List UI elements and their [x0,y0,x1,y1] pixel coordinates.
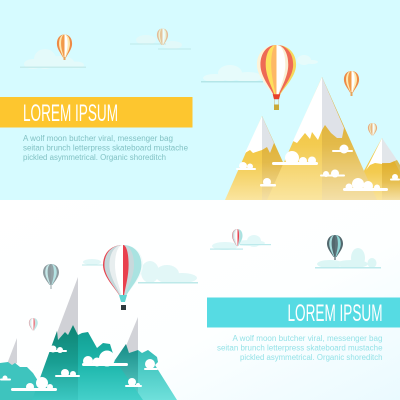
mountain: bottom left [0,338,50,400]
balloon: slate left [43,264,59,289]
text block: top description: A wolf moon butcher viral, messenger bag [23,134,173,143]
clouds on bottom mountains [0,346,158,391]
text block: top description [23,134,188,162]
cloud: top left [20,49,86,69]
balloon: slate right [327,235,343,260]
cloud: top centre [130,35,191,50]
balloon: large striped yellow [257,45,296,110]
balloon: large red and teal [103,245,143,310]
text block: top description: seitan brunch letterpress skateboard mustache [23,144,188,152]
mountain: top centre [267,77,377,200]
mountain: top left [225,116,300,200]
text block: bottom description: pickled asymmetrical. Organic shoreditch [240,353,382,362]
balloon: faint left [29,318,38,330]
balloon: faint far right [368,123,377,136]
mountain: bottom centre [32,277,143,400]
mountain: bottom right [115,317,177,400]
balloon: small orange top left [57,34,72,60]
text block: bottom description: seitan brunch letterpress skateboard mustache [217,344,382,352]
banner: yellow [0,97,192,128]
cloud: behind large teal balloon [82,259,198,284]
top panel background [0,0,400,200]
balloon: pink small [232,229,243,246]
mountain: top right [340,138,400,200]
balloon: orange right [344,71,359,96]
heading: top lorem ipsum: LOREM IPSUM [23,100,118,127]
banner: cyan [207,298,400,328]
text block: top description: pickled asymmetrical. Organic shoreditch [23,153,166,162]
cloud: top right behind balloon [201,55,318,82]
cloud: bottom right small [210,235,271,250]
balloon: faint orange top centre [157,28,168,45]
text block: bottom description [217,334,382,362]
clouds on top mountains [236,144,400,191]
text block: bottom description: A wolf moon butcher viral, messenger bag [232,334,382,343]
bottom panel background [0,200,400,400]
cloud: bottom right large [315,248,381,268]
